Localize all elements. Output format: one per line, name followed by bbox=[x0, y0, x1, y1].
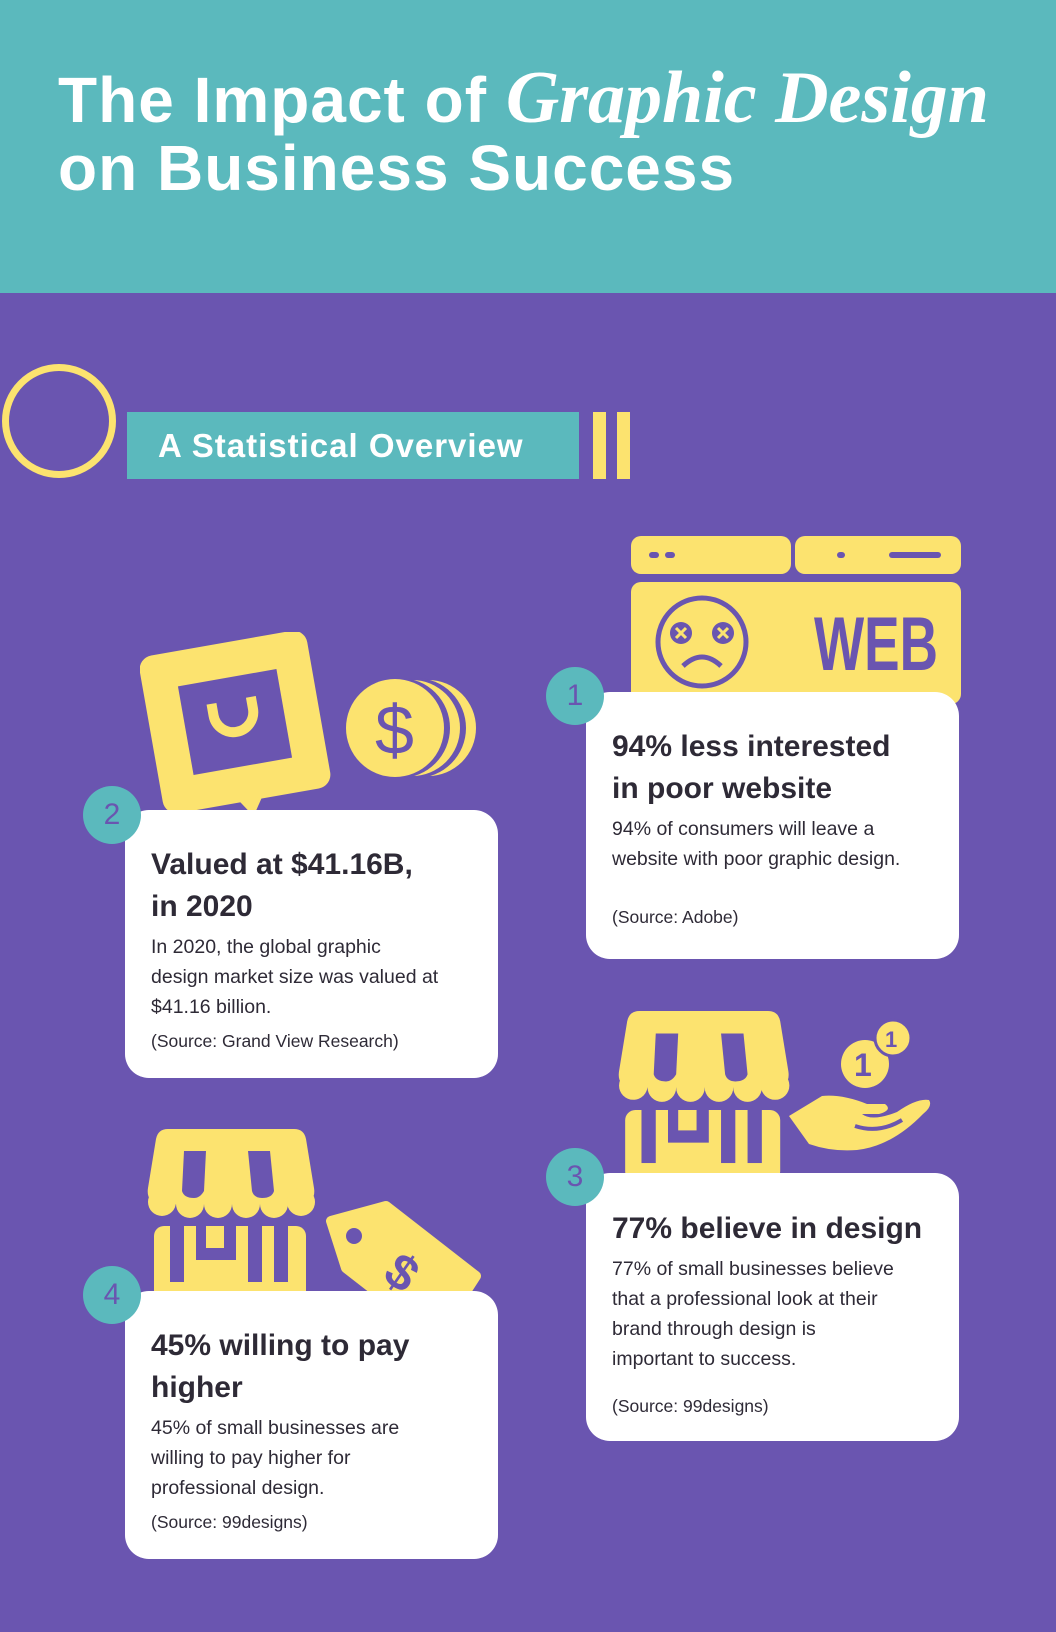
number badge 1 bbox=[546, 667, 604, 725]
body bbox=[612, 1258, 894, 1370]
body: brand through design is bbox=[612, 1318, 816, 1340]
heading: higher bbox=[151, 1371, 243, 1404]
header band bbox=[0, 0, 1056, 293]
heading: 94% less interested bbox=[612, 730, 890, 763]
title: The Impact of Graphic Design bbox=[58, 57, 989, 139]
icon: store with hand and coins: 1 bbox=[854, 1047, 872, 1083]
decorative ring bbox=[2, 364, 116, 478]
body bbox=[151, 936, 438, 1018]
heading: in 2020 bbox=[151, 890, 253, 923]
source: (Source: Adobe) bbox=[612, 907, 738, 927]
heading: 77% believe in design bbox=[612, 1212, 922, 1245]
body bbox=[612, 818, 900, 870]
number badge 3: 3 bbox=[567, 1160, 583, 1193]
source: (Source: Grand View Research) bbox=[151, 1031, 399, 1051]
source: (Source: 99designs) bbox=[612, 1396, 769, 1416]
card 1: poor website bbox=[586, 692, 959, 959]
banner bars bbox=[593, 412, 630, 479]
icon: store with hand and coins: 1 bbox=[885, 1027, 897, 1052]
number badge 2: 2 bbox=[104, 798, 120, 831]
body: 45% of small businesses are bbox=[151, 1417, 399, 1439]
body: willing to pay higher for bbox=[151, 1447, 350, 1469]
icon: shopping bag and coins bbox=[140, 632, 476, 810]
icon: browser with sad face bbox=[631, 536, 961, 703]
icon: store with price tag bbox=[148, 1129, 481, 1304]
number badge 1: 1 bbox=[567, 679, 583, 712]
body: that a professional look at their bbox=[612, 1288, 878, 1310]
body: design market size was valued at bbox=[151, 966, 438, 988]
body: In 2020, the global graphic bbox=[151, 936, 381, 958]
card 4: willing to pay bbox=[125, 1291, 498, 1559]
title: on Business Success bbox=[58, 132, 735, 204]
icon: store with hand and coins bbox=[618, 1011, 930, 1173]
body: $41.16 billion. bbox=[151, 996, 271, 1018]
body: professional design. bbox=[151, 1477, 324, 1499]
body: 77% of small businesses believe bbox=[612, 1258, 894, 1280]
heading: Valued at $41.16B, bbox=[151, 848, 413, 881]
card 2: market value bbox=[125, 810, 498, 1078]
heading bbox=[612, 730, 890, 805]
card 3: believe in design bbox=[586, 1173, 959, 1441]
heading: in poor website bbox=[612, 772, 832, 805]
number badge 3 bbox=[546, 1148, 604, 1206]
heading bbox=[151, 848, 413, 923]
icon: store with price tag: $ bbox=[374, 1242, 430, 1304]
title bbox=[58, 57, 989, 204]
body: website with poor graphic design. bbox=[612, 848, 900, 870]
body: 94% of consumers will leave a bbox=[612, 818, 874, 840]
body bbox=[151, 1417, 399, 1499]
body: important to success. bbox=[612, 1348, 796, 1370]
section banner bbox=[127, 412, 579, 479]
heading bbox=[151, 1329, 410, 1404]
icon: shopping bag and coins: $ bbox=[375, 691, 414, 769]
section banner: A Statistical Overview bbox=[158, 427, 524, 464]
heading: 45% willing to pay bbox=[151, 1329, 409, 1362]
number badge 4: 4 bbox=[104, 1278, 120, 1311]
number badge 4 bbox=[83, 1266, 141, 1324]
source: (Source: 99designs) bbox=[151, 1512, 308, 1532]
number badge 2 bbox=[83, 786, 141, 844]
